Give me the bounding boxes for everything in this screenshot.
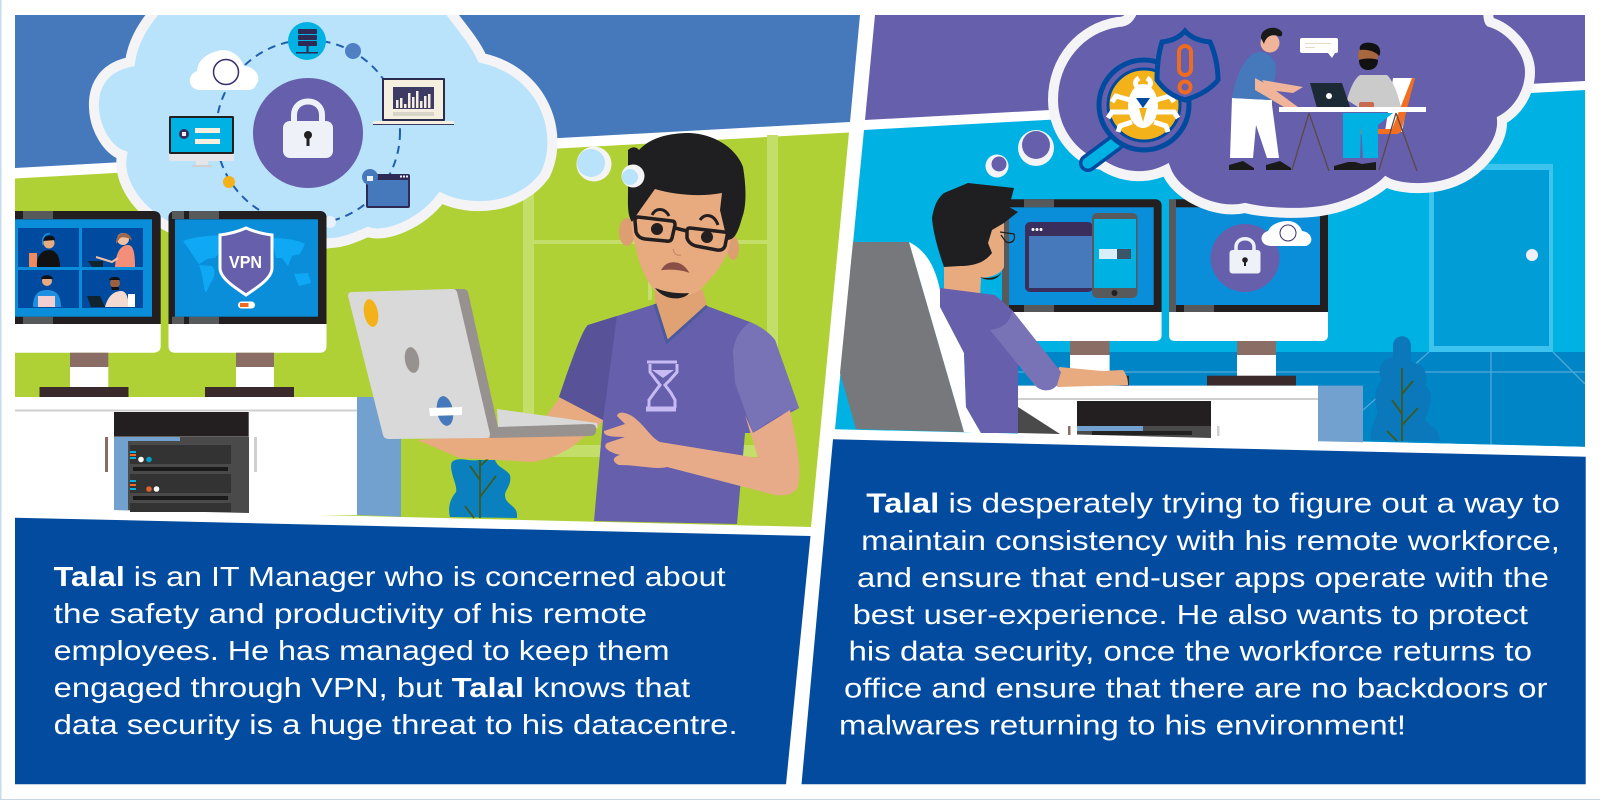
monitor: video call — [15, 211, 161, 397]
beard line — [980, 273, 1001, 280]
caption text: his data security, once the workforce returns to — [848, 636, 1532, 667]
icon: VPN shield: VPN — [229, 252, 262, 272]
icon: white node — [326, 216, 336, 228]
icon: blue node — [345, 43, 361, 59]
icon: sync cloud — [190, 50, 258, 90]
neck and face — [944, 223, 1004, 297]
phone — [1092, 213, 1138, 298]
thought bubble: small — [622, 164, 644, 188]
world map — [183, 235, 311, 293]
caption text: and ensure that end-user apps operate with the — [857, 562, 1549, 593]
thought bubble: small — [986, 154, 1008, 178]
glasses — [1000, 232, 1015, 243]
left arm — [417, 397, 605, 462]
icon: warning shield — [1157, 31, 1218, 100]
icon: central padlock — [253, 78, 363, 188]
neck — [655, 287, 707, 343]
speech bubble — [1300, 38, 1338, 58]
door — [1429, 164, 1553, 352]
top sky band — [15, 15, 860, 168]
caption text — [839, 488, 1560, 740]
icon: padlock — [1210, 224, 1280, 292]
eyebrows — [652, 209, 718, 225]
mouth — [663, 263, 687, 271]
nose — [673, 249, 681, 255]
panel: right scene — [835, 5, 1585, 447]
bug — [1108, 78, 1178, 132]
window frame — [523, 135, 778, 457]
monitor: devices — [1002, 199, 1162, 386]
monitor: secure cloud — [1169, 199, 1328, 386]
desk — [15, 397, 401, 517]
sync cloud on monitor — [1262, 221, 1311, 246]
caption text: maintain consistency with his remote workforce, — [861, 525, 1560, 556]
caption text: malwares returning to his environment! — [839, 709, 1406, 740]
cyan wall — [835, 90, 1585, 447]
thought bubble: large — [1018, 130, 1054, 166]
caption text: Talal is desperately trying to figure out a way to — [866, 488, 1560, 519]
goatee — [655, 288, 689, 298]
caption text: Talal is an IT Manager who is concerned about — [54, 561, 726, 592]
sleeve — [990, 310, 1061, 390]
icon: VPN shield — [220, 228, 272, 295]
caption text: office and ensure that there are no backdoors or — [844, 673, 1548, 704]
server cabinet — [114, 412, 249, 513]
hair — [932, 183, 1018, 267]
caption text: the safety and productivity of his remote — [54, 598, 647, 629]
video participants — [29, 233, 135, 307]
hair — [628, 133, 746, 240]
thought bubble: large — [576, 146, 612, 182]
server cabinet — [1077, 401, 1211, 438]
shirt — [559, 304, 799, 524]
caption text: employees. He has managed to keep them — [54, 635, 670, 666]
person seated at desk — [1279, 43, 1426, 171]
thought cloud: security network — [94, 5, 552, 248]
panel: left scene — [15, 5, 860, 527]
caption text: best user-experience. He also wants to protect — [853, 599, 1528, 630]
floor — [990, 352, 1585, 447]
person standing — [1229, 28, 1303, 170]
arm — [1057, 367, 1128, 387]
icon: magnifier with bug — [1088, 60, 1189, 163]
desk — [1018, 386, 1363, 442]
left sleeve — [559, 316, 617, 420]
icon: analytics laptop — [373, 78, 454, 125]
right sleeve — [733, 322, 799, 433]
character: Talal facing viewer — [348, 133, 799, 524]
icon: server — [288, 22, 326, 60]
plant — [449, 458, 517, 518]
purple top band — [865, 15, 1585, 120]
face — [631, 185, 731, 297]
glasses — [635, 217, 727, 250]
panel: left caption — [15, 518, 810, 784]
caption text: engaged through VPN, but Talal knows that — [54, 672, 690, 703]
eyes — [651, 223, 663, 235]
icon: yellow node — [223, 176, 235, 188]
toggle — [238, 302, 255, 308]
character: Talal from behind — [932, 183, 1128, 433]
caption text: data security is a huge threat to his datacentre. — [54, 709, 738, 740]
icon: login monitor — [169, 116, 234, 167]
thought cloud: malware and collaboration — [1053, 5, 1530, 213]
ears — [619, 218, 635, 246]
shirt — [940, 288, 1018, 433]
icon: browser window with lock — [362, 169, 410, 208]
plant — [1371, 336, 1440, 441]
green wall — [15, 132, 849, 527]
monitor: VPN — [168, 211, 326, 397]
panel: right caption — [802, 439, 1586, 784]
hourglass logo — [646, 362, 677, 409]
tablet window — [1025, 222, 1093, 292]
right arm and hand — [604, 410, 799, 495]
caption text — [54, 561, 738, 740]
laptop — [348, 289, 598, 439]
office chair — [840, 242, 981, 433]
dashed ring — [216, 40, 400, 224]
